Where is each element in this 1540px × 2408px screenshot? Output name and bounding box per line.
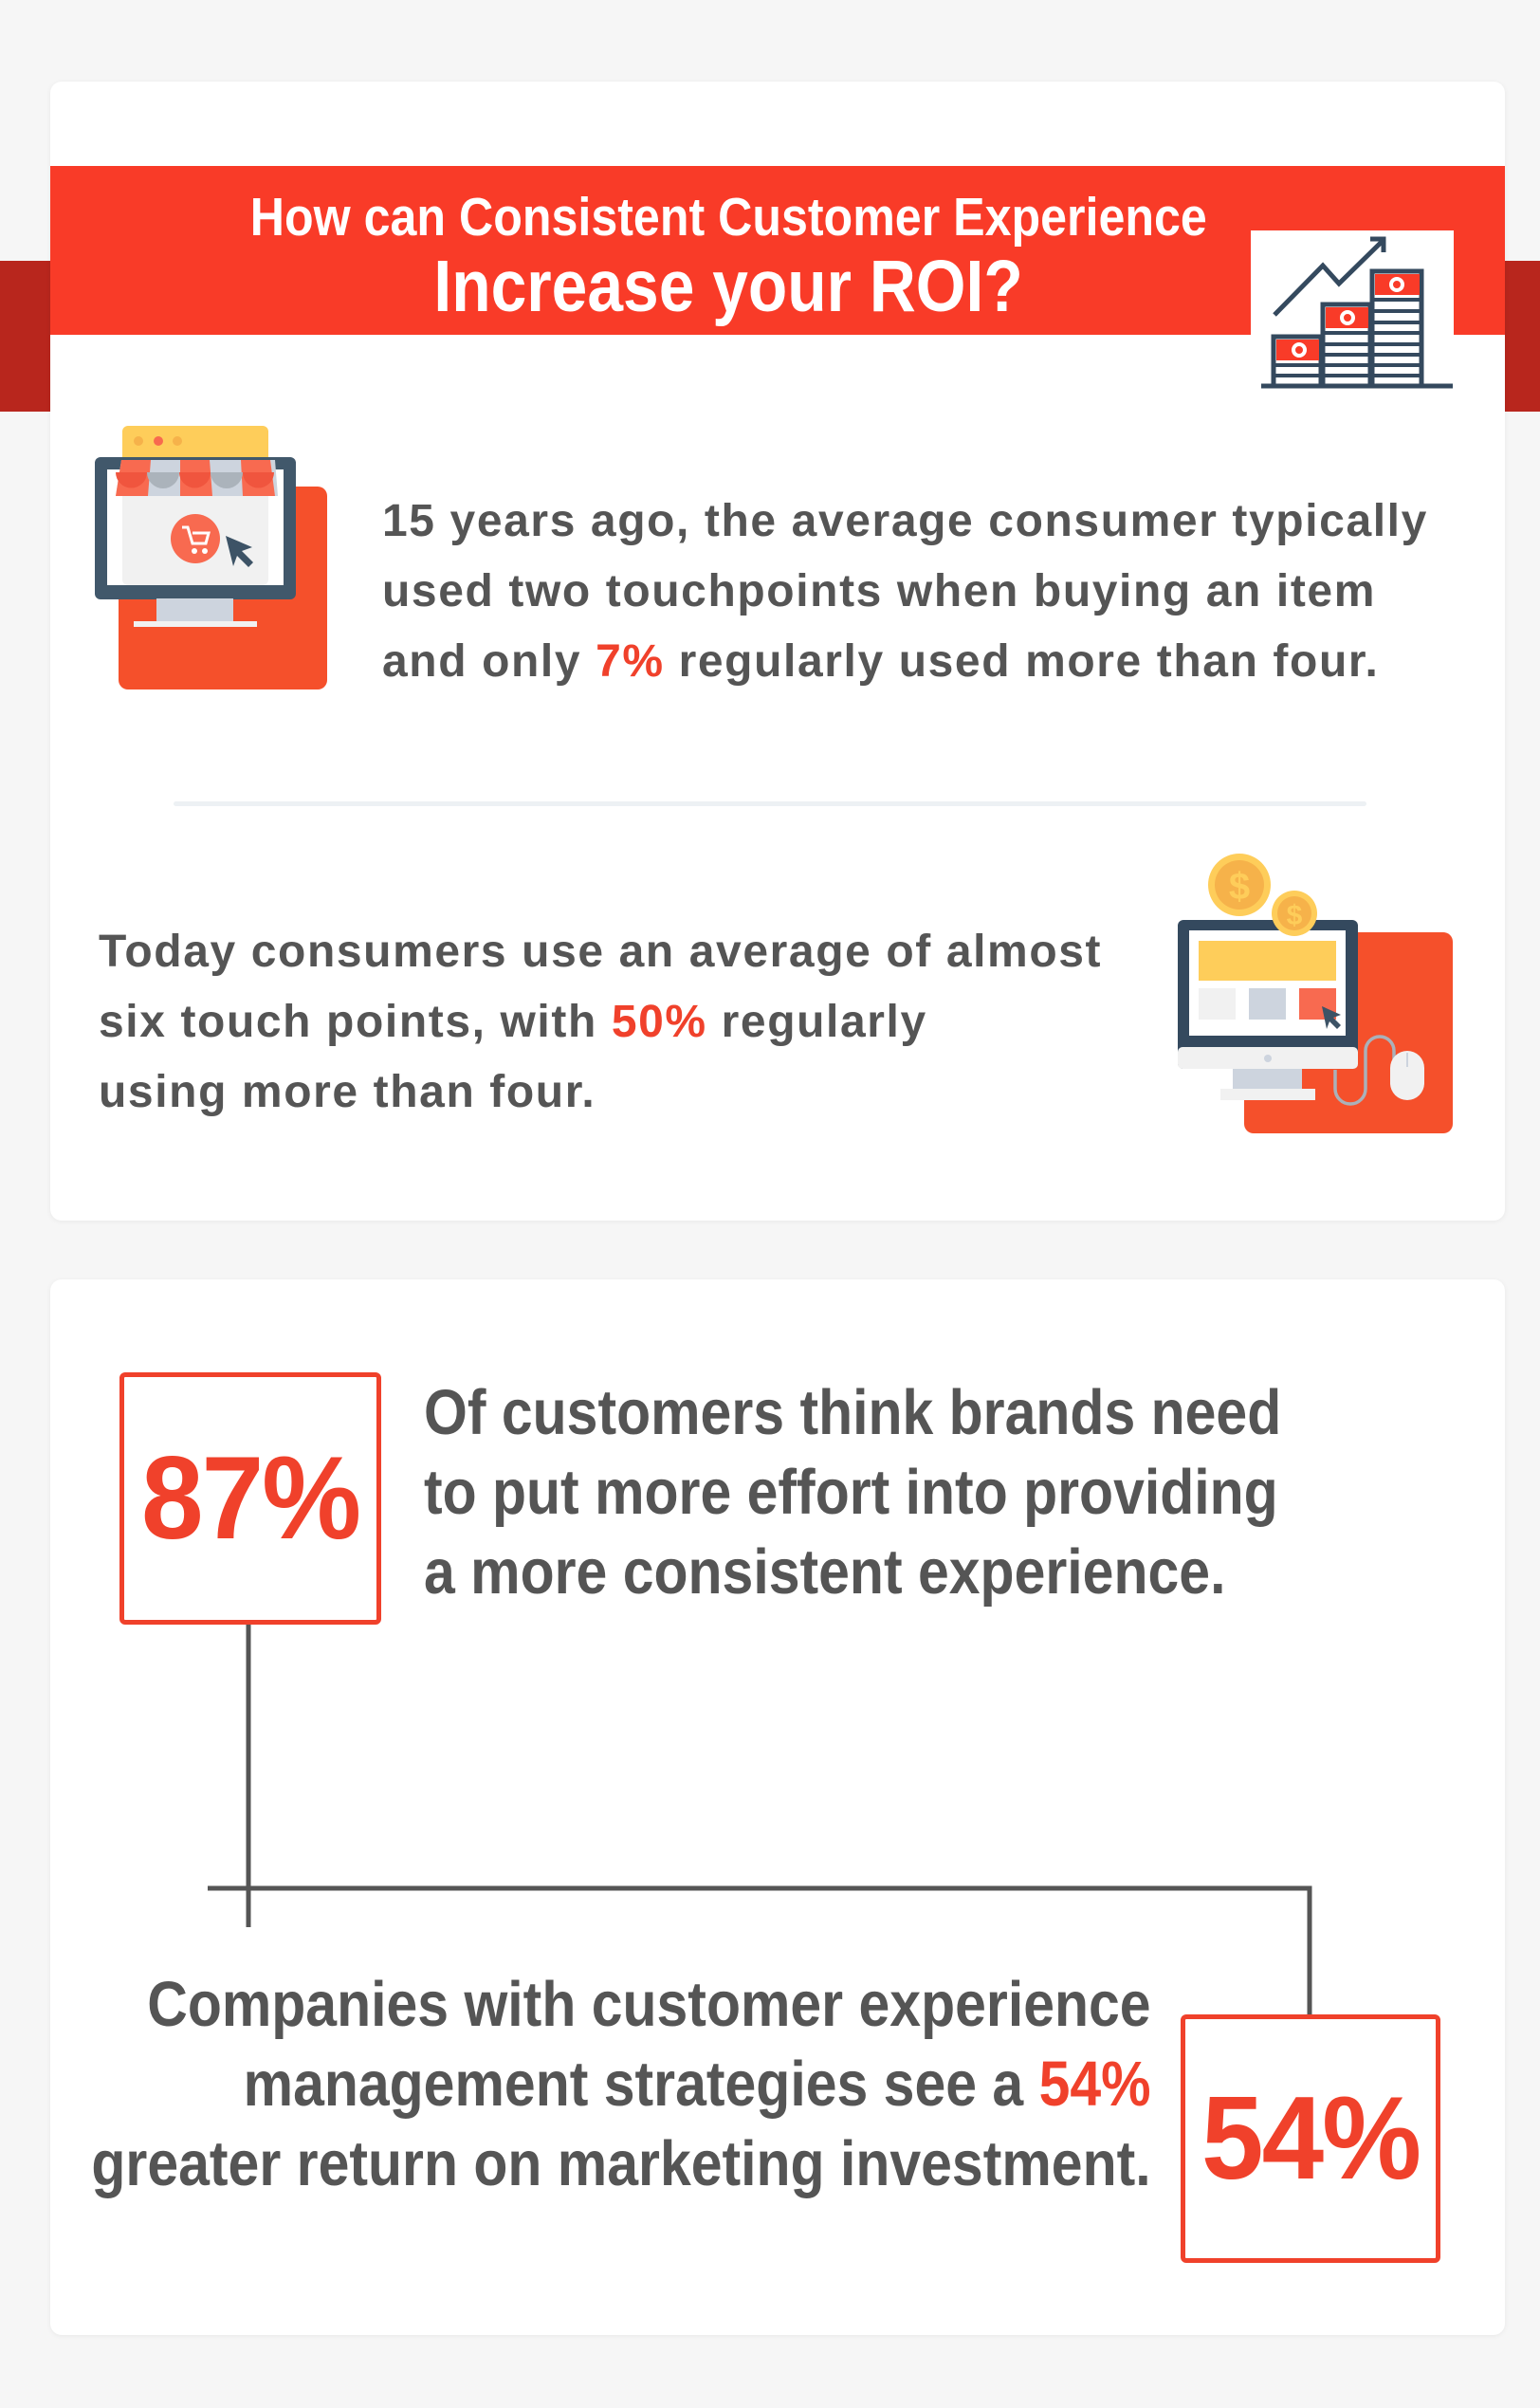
icon: computer with coins: $ [1229,866,1250,908]
icon: computer with coins [1178,854,1453,1133]
title line 2: Increase your ROI? [433,246,1023,327]
stat box: 87%: 87% [141,1433,359,1564]
text: today [99,927,1102,1117]
title line 1: How can Consistent Customer Experience [249,187,1207,248]
text: 87% statement: a more consistent experience. [424,1536,1225,1608]
text: 87% statement [424,1377,1281,1608]
stat box: 87% [119,1372,381,1625]
text: 15 years ago: 15 years ago, the average consumer typically [382,496,1428,546]
text: 87% statement: Of customers think brands need [424,1377,1281,1448]
icon: computer with coins: $ [1287,900,1303,931]
icon: growth chart [1251,230,1454,389]
text: 15 years ago: and only 7% regularly used more than four. [382,636,1379,687]
text: today: using more than four. [99,1067,596,1117]
text: 54% statement: management strategies see a 54% [244,2049,1151,2120]
card 1 [50,82,1505,1221]
connector lines [208,1625,1312,2014]
text: 87% statement: to put more effort into providing [424,1457,1278,1528]
text: 54% statement: Companies with customer experience [148,1969,1151,2040]
icon: online shop [95,426,327,689]
stat box: 54%: 54% [1201,2073,1420,2204]
stat box: 54% [1181,2014,1440,2263]
card 2 [50,1279,1505,2335]
side bars [0,261,1540,412]
text: 54% statement [92,1969,1151,2199]
text: today: six touch points, with 50% regularly [99,997,927,1047]
title banner [50,166,1505,335]
text: 15 years ago: used two touchpoints when buying an item [382,566,1376,616]
text: 15 years ago [382,496,1428,687]
text: 54% statement: greater return on marketing investment. [92,2128,1151,2199]
text: today: Today consumers use an average of almost [99,927,1102,977]
